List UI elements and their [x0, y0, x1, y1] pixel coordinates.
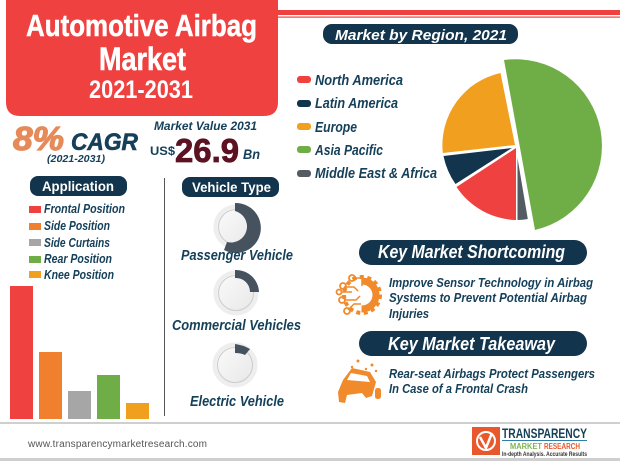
CAGR callout: (2021-2031): [47, 153, 105, 165]
website url: www.transparencymarketresearch.com: [27, 439, 207, 450]
logo: [472, 425, 587, 458]
region legend: Latin America: [315, 96, 398, 112]
application legend: Side Curtains: [44, 236, 110, 250]
donut: passenger vehicle: [181, 203, 293, 264]
heading: vehicle type: Vehicle Type: [192, 180, 271, 195]
application legend: Rear Position: [44, 252, 112, 266]
takeaway text: In Case of a Frontal Crash: [389, 381, 528, 396]
application legend: [29, 202, 125, 282]
market value callout: Bn: [243, 146, 260, 162]
CAGR callout: 8%: [13, 120, 64, 157]
icon: crashed car: [338, 360, 381, 403]
shortcoming text: Injuries: [389, 306, 429, 321]
heading: vehicle type: [182, 177, 279, 197]
heading: application: [30, 176, 127, 196]
title panel: 2021-2031: [89, 76, 193, 104]
heading: key market takeaway: [359, 331, 587, 356]
icon: sensor gear: [336, 275, 380, 314]
donut: commercial vehicles: [172, 270, 301, 334]
region legend: North America: [315, 73, 403, 89]
application legend: Side Position: [44, 219, 110, 233]
donut: commercial vehicles: Commercial Vehicles: [172, 318, 301, 334]
logo: TRANSPARENCY: [502, 425, 587, 441]
region legend: Europe: [315, 120, 357, 136]
title panel: Automotive Airbag: [26, 8, 257, 43]
logo: In-depth Analysis. Accurate Results: [502, 451, 587, 458]
title panel: [6, 0, 278, 116]
heading: application: Application: [42, 178, 114, 194]
top rule: [278, 10, 620, 18]
application legend: Frontal Position: [44, 202, 125, 216]
shortcoming text: Systems to Prevent Potential Airbag: [389, 290, 587, 305]
region legend: [297, 73, 437, 182]
takeaway text: [389, 366, 595, 396]
heading: market by region: Market by Region, 2021: [335, 27, 507, 44]
CAGR callout: [13, 120, 139, 165]
CAGR callout: CAGR: [71, 129, 139, 156]
shortcoming text: [389, 275, 593, 321]
donut: electric vehicle: Electric Vehicle: [190, 394, 284, 410]
market value callout: Market Value 2031: [154, 119, 257, 133]
donut: passenger vehicle: Passenger Vehicle: [181, 248, 293, 264]
takeaway text: Rear-seat Airbags Protect Passengers: [389, 366, 595, 381]
footer rules: [0, 422, 620, 461]
application legend: Knee Position: [44, 268, 114, 282]
donut: electric vehicle: [190, 344, 284, 410]
logo: RESEARCH: [544, 442, 580, 451]
region legend: Middle East & Africa: [315, 166, 437, 182]
market value callout: [150, 119, 260, 169]
market value callout: US$: [150, 144, 175, 158]
region legend: Asia Pacific: [314, 143, 383, 159]
logo: MARKET: [510, 442, 542, 451]
heading: key market takeaway: Key Market Takeaway: [388, 334, 556, 354]
bar chart: application: [10, 286, 149, 419]
heading: key market shortcoming: Key Market Shortcoming: [378, 242, 565, 262]
shortcoming text: Improve Sensor Technology in Airbag: [389, 275, 593, 290]
pie chart: market by region: [442, 59, 602, 230]
market value callout: 26.9: [175, 132, 239, 169]
title panel: Market: [99, 41, 186, 77]
